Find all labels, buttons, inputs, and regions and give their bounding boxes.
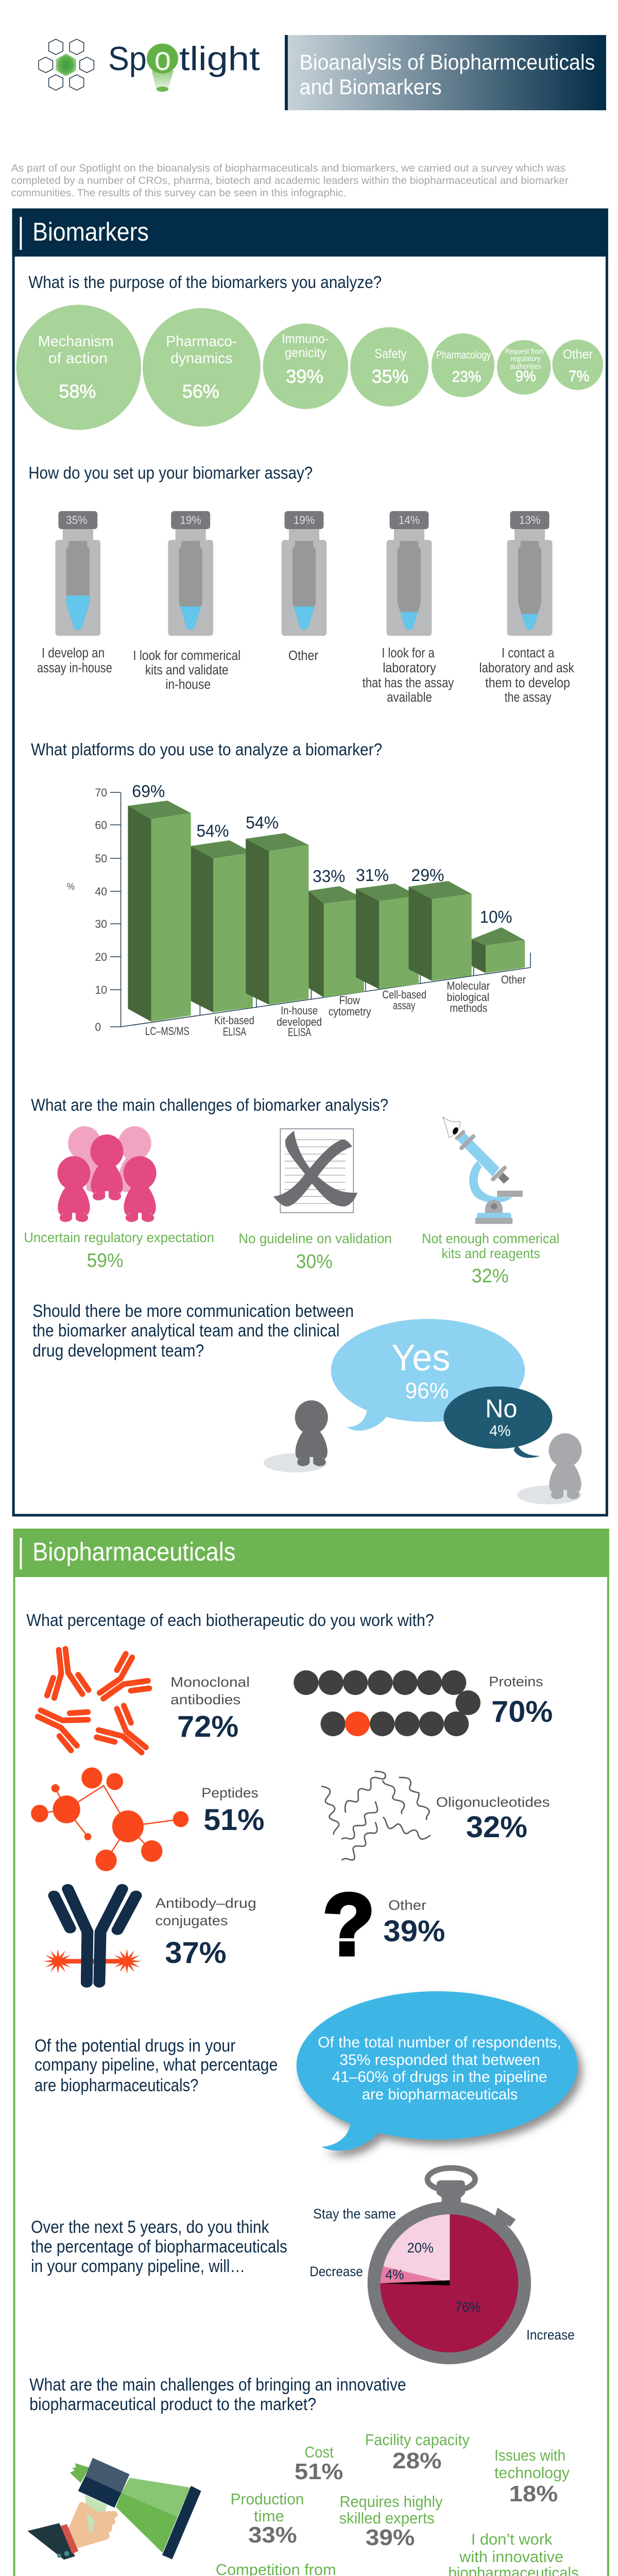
- vial labels: [37, 646, 574, 705]
- panel: Biopharmaceuticals: [13, 1529, 609, 2576]
- question: next 5 years: Over the next 5 years, do you think: [31, 2217, 269, 2237]
- callout: pipeline bubble: 41–60% of drugs in the pipeline: [332, 2069, 547, 2086]
- axis labels: 10: [95, 984, 107, 996]
- vial labels: laboratory: [383, 661, 436, 675]
- speech bubble: yes: Yes: [391, 1337, 450, 1379]
- vial labels: I look for a: [382, 646, 435, 660]
- stopwatch pie chart: 20%: [407, 2240, 434, 2256]
- label: proteins: Proteins: [489, 1674, 543, 1689]
- challenge list: innovative biopharmaceuticals: time: [254, 2507, 284, 2525]
- bubble chart: biomarker purpose: Other: [563, 348, 593, 362]
- challenge labels: 59%: [87, 1249, 124, 1271]
- figure: dark person: [264, 1400, 328, 1472]
- question: communication: drug development team?: [32, 1341, 204, 1361]
- question: innovative product challenges: What are the main challenges of bringing an innovative: [29, 2375, 406, 2395]
- axis labels: 70: [95, 786, 107, 799]
- axis labels: %: [67, 882, 75, 892]
- question: next 5 years: the percentage of biopharmaceuticals: [31, 2237, 287, 2257]
- speech bubble: no: [443, 1386, 552, 1458]
- vial 14%: [387, 511, 432, 638]
- icon: monoclonal antibodies: [38, 1649, 149, 1753]
- vial labels: the assay: [505, 690, 552, 705]
- figure: light person: [517, 1433, 582, 1504]
- vial labels: them to develop: [485, 676, 570, 690]
- heading: Biomarkers: Biomarkers: [32, 217, 149, 246]
- icon: hexagon cluster: [39, 39, 94, 90]
- label: peptides: 51%: [203, 1804, 265, 1837]
- challenge list: innovative biopharmaceuticals: 39%: [366, 2525, 415, 2550]
- speech bubble: no: No: [485, 1394, 517, 1423]
- intro text: [11, 163, 569, 199]
- intro text: communities. The results of this survey can be seen in this infographic.: [11, 188, 346, 199]
- challenge list: innovative biopharmaceuticals: technology: [494, 2464, 570, 2482]
- label: other: [383, 1897, 445, 1948]
- category labels: Flow: [339, 994, 360, 1007]
- question: communication: Should there be more communication between: [32, 1301, 354, 1321]
- label: antibody-drug conjugates: [156, 1895, 256, 1970]
- intro text: As part of our Spotlight on the bioanalysis of biopharmaceuticals and biomarkers, we carried out a survey which was: [11, 163, 565, 174]
- label: monoclonal antibodies: [170, 1674, 250, 1743]
- vial 19%: [168, 511, 213, 637]
- challenge labels: [24, 1230, 559, 1286]
- stopwatch pie chart: [310, 2168, 575, 2364]
- category labels: developed: [277, 1015, 322, 1028]
- axis labels: 60: [95, 819, 107, 832]
- logo wordmark: o: [154, 40, 171, 77]
- challenge labels: 30%: [296, 1250, 333, 1272]
- title banner: Bioanalysis of Biopharmceuticals: [300, 50, 595, 74]
- bar values: 54%: [246, 813, 279, 832]
- chart axes: [110, 792, 530, 1027]
- label: proteins: 70%: [491, 1696, 553, 1728]
- challenge list: innovative biopharmaceuticals: with innovative: [459, 2548, 563, 2566]
- vial labels: kits and validate: [145, 663, 229, 677]
- callout: pipeline bubble: 35% responded that between: [339, 2052, 540, 2069]
- vial 13%: 13%: [519, 514, 540, 527]
- bar values: [132, 782, 512, 926]
- bar values: 33%: [313, 867, 345, 886]
- bubble chart: biomarker purpose: 39%: [286, 366, 323, 387]
- bar values: 54%: [196, 821, 229, 840]
- axis labels: 30: [95, 918, 107, 930]
- title banner: [285, 35, 606, 110]
- vial labels: Other: [288, 649, 318, 663]
- icon: antibody-drug conjugate: [43, 1889, 142, 1982]
- question: next 5 years: in your company pipeline, will…: [31, 2257, 245, 2276]
- icon: peptides: [31, 1767, 188, 1871]
- icon: megaphone: [27, 2458, 201, 2560]
- label: antibody-drug conjugates: Antibody–drug: [156, 1895, 256, 1911]
- logo wordmark: tlight: [179, 40, 260, 77]
- question: pipeline share: Of the potential drugs in your: [35, 2036, 235, 2056]
- bubble chart: biomarker purpose: 23%: [452, 368, 481, 385]
- challenge labels: Uncertain regulatory expectation: [24, 1230, 214, 1245]
- category labels: biological: [447, 991, 489, 1004]
- label: peptides: Peptides: [201, 1785, 259, 1801]
- category labels: Cell-based: [382, 988, 426, 1001]
- label: monoclonal antibodies: antibodies: [170, 1692, 241, 1707]
- icon: spotlight beam: [147, 43, 178, 92]
- question: assay set-up: How do you set up your biomarker assay?: [28, 463, 313, 482]
- vial labels: that has the assay: [363, 676, 454, 690]
- label: oligonucleotides: [436, 1794, 550, 1844]
- category labels: cytometry: [329, 1005, 371, 1018]
- vial labels: laboratory and ask: [479, 661, 574, 675]
- heading: Biopharmaceuticals: Biopharmaceuticals: [32, 1537, 235, 1566]
- stopwatch pie chart: Stay the same: [313, 2206, 396, 2222]
- bars: [128, 801, 525, 1022]
- bubble chart: biomarker purpose: of action: [48, 350, 108, 367]
- icon: crossed-out document: [273, 1129, 357, 1213]
- speech bubble: yes: 96%: [405, 1378, 449, 1403]
- category labels: Molecular: [447, 979, 490, 992]
- challenge list: innovative biopharmaceuticals: [216, 2431, 579, 2576]
- bar values: 10%: [479, 907, 512, 926]
- challenge list: innovative biopharmaceuticals: 33%: [248, 2522, 297, 2548]
- vial 13%: [507, 511, 552, 638]
- header: Spotlight logo: [39, 39, 260, 92]
- label: antibody-drug conjugates: 37%: [165, 1937, 227, 1970]
- question: platforms: What platforms do you use to analyze a biomarker?: [31, 740, 382, 759]
- bubble chart: biomarker purpose: Pharmacology: [436, 349, 491, 361]
- speech bubble: no: 4%: [489, 1422, 511, 1439]
- label: oligonucleotides: Oligonucleotides: [436, 1794, 550, 1810]
- label: other: 39%: [383, 1915, 445, 1948]
- label: monoclonal antibodies: 72%: [177, 1710, 238, 1743]
- challenge list: innovative biopharmaceuticals: Facility capacity: [365, 2431, 470, 2449]
- category labels: Other: [501, 973, 526, 986]
- bubble chart: biomarker purpose: 56%: [182, 381, 219, 402]
- icon: question mark: ?: [323, 1875, 374, 1973]
- vial 19%: 19%: [180, 514, 201, 527]
- bubble chart: biomarker purpose: Mechanism: [38, 333, 114, 350]
- bar values: 31%: [356, 866, 389, 885]
- icon: microscope: [442, 1116, 523, 1224]
- challenge list: innovative biopharmaceuticals: Requires highly: [339, 2493, 443, 2511]
- vial 14%: 14%: [399, 514, 420, 527]
- challenge list: innovative biopharmaceuticals: 18%: [509, 2481, 558, 2506]
- vial labels: I look for commerical: [133, 649, 241, 663]
- category labels: [145, 973, 526, 1039]
- stopwatch pie chart: Decrease: [310, 2264, 363, 2279]
- logo wordmark: Sp: [108, 40, 147, 77]
- label: other: Other: [388, 1897, 426, 1913]
- icon: oligonucleotides: [322, 1771, 430, 1860]
- question: pipeline share: company pipeline, what percentage: [35, 2055, 278, 2075]
- intro text: completed by a number of CROs, pharma, biotech and academic leaders within the biopharmaceutical and biomarker: [11, 175, 569, 187]
- bubble chart: biomarker purpose: genicity: [285, 346, 327, 360]
- vial labels: I contact a: [502, 646, 555, 660]
- label: oligonucleotides: 32%: [466, 1811, 527, 1844]
- challenge list: innovative biopharmaceuticals: Issues with: [494, 2446, 565, 2464]
- challenge list: innovative biopharmaceuticals: skilled experts: [339, 2509, 435, 2527]
- vial labels: available: [387, 690, 432, 705]
- axis labels: [67, 786, 107, 1033]
- challenge labels: kits and reagents: [442, 1246, 540, 1261]
- axis labels: 50: [95, 852, 107, 865]
- 3D bar chart: platforms: [67, 782, 530, 1039]
- category labels: LC–MS/MS: [145, 1025, 190, 1038]
- bubble chart: biomarker purpose: dynamics: [170, 350, 232, 367]
- stopwatch pie chart: Increase: [526, 2327, 575, 2343]
- axis labels: 20: [95, 951, 107, 963]
- question: purpose: What is the purpose of the biomarkers you analyze?: [28, 273, 382, 292]
- icon: group of people: [57, 1126, 157, 1222]
- bubble chart: biomarker purpose: Immuno-: [282, 332, 329, 346]
- question: next 5 years: [31, 2217, 287, 2276]
- vial labels: assay in-house: [37, 661, 112, 675]
- challenge labels: 32%: [472, 1265, 509, 1286]
- label: monoclonal antibodies: Monoclonal: [170, 1674, 250, 1690]
- label: proteins: [489, 1674, 553, 1728]
- vial 35%: 35%: [66, 514, 88, 527]
- category labels: In-house: [281, 1004, 318, 1017]
- question: biotherapeutics: What percentage of each biotherapeutic do you work with?: [26, 1611, 434, 1630]
- bubble chart: biomarker purpose: authorities: [510, 363, 541, 371]
- question: innovative product challenges: biopharmaceutical product to the market?: [29, 2395, 316, 2414]
- callout: pipeline bubble: [297, 1991, 578, 2151]
- challenge list: innovative biopharmaceuticals: Production: [231, 2490, 304, 2508]
- axis labels: 40: [95, 885, 107, 898]
- challenge list: innovative biopharmaceuticals: Cost: [304, 2443, 334, 2461]
- bubble chart: biomarker purpose: Safety: [374, 347, 407, 361]
- vial labels: I develop an: [42, 646, 105, 660]
- title banner: and Biomarkers: [300, 75, 442, 99]
- vial 35%: [55, 511, 100, 637]
- challenge list: innovative biopharmaceuticals: 28%: [392, 2448, 442, 2473]
- question: pipeline share: are biopharmaceuticals?: [35, 2076, 198, 2095]
- bubble chart: biomarker purpose: Request from: [505, 348, 544, 356]
- question: innovative product challenges: [29, 2375, 406, 2414]
- category labels: methods: [450, 1002, 487, 1014]
- vial 19% other: [282, 511, 327, 637]
- challenge labels: No guideline on validation: [238, 1231, 392, 1246]
- logo wordmark: [108, 40, 260, 77]
- stopwatch pie chart: 4%: [385, 2267, 404, 2282]
- bar values: 69%: [132, 782, 165, 801]
- bubble chart: biomarker purpose: 58%: [59, 381, 96, 402]
- vial labels: in-house: [165, 677, 211, 692]
- challenge list: innovative biopharmaceuticals: 51%: [295, 2459, 343, 2484]
- category labels: ELISA: [223, 1025, 246, 1038]
- question: communication: [32, 1301, 354, 1361]
- bubble chart: biomarker purpose: Pharmaco-: [166, 333, 237, 350]
- bubble chart: biomarker purpose: 7%: [569, 368, 589, 385]
- label: antibody-drug conjugates: conjugates: [156, 1913, 228, 1928]
- icon: protein chain: [294, 1670, 480, 1736]
- speech bubble: yes: [331, 1319, 525, 1431]
- bubble chart: biomarker purpose: [16, 305, 603, 430]
- callout: pipeline bubble: Of the total number of respondents,: [318, 2034, 561, 2051]
- panel: Biomarkers: [12, 209, 608, 1515]
- question: pipeline share: [35, 2036, 278, 2095]
- category labels: ELISA: [288, 1026, 312, 1039]
- vial chart: assay set-up: [37, 511, 574, 705]
- callout: pipeline bubble: are biopharmaceuticals: [362, 2086, 518, 2103]
- vial 19% other: 19%: [294, 514, 315, 527]
- bubble chart: biomarker purpose: regulatory: [511, 355, 541, 363]
- question: communication: the biomarker analytical team and the clinical: [32, 1321, 339, 1341]
- bubble chart: biomarker purpose: 9%: [515, 368, 536, 385]
- category labels: assay: [393, 999, 415, 1012]
- challenge labels: Not enough commerical: [422, 1231, 559, 1246]
- category labels: Kit-based: [214, 1014, 254, 1027]
- bar values: 29%: [411, 866, 444, 885]
- stopwatch pie chart: 76%: [455, 2299, 480, 2315]
- bubble chart: biomarker purpose: 35%: [372, 366, 408, 387]
- axis labels: 0: [95, 1021, 101, 1033]
- challenge list: innovative biopharmaceuticals: I don’t work: [471, 2530, 553, 2548]
- question: challenges of biomarker analysis: What are the main challenges of biomarker analysis?: [31, 1095, 388, 1114]
- label: peptides: [201, 1785, 265, 1837]
